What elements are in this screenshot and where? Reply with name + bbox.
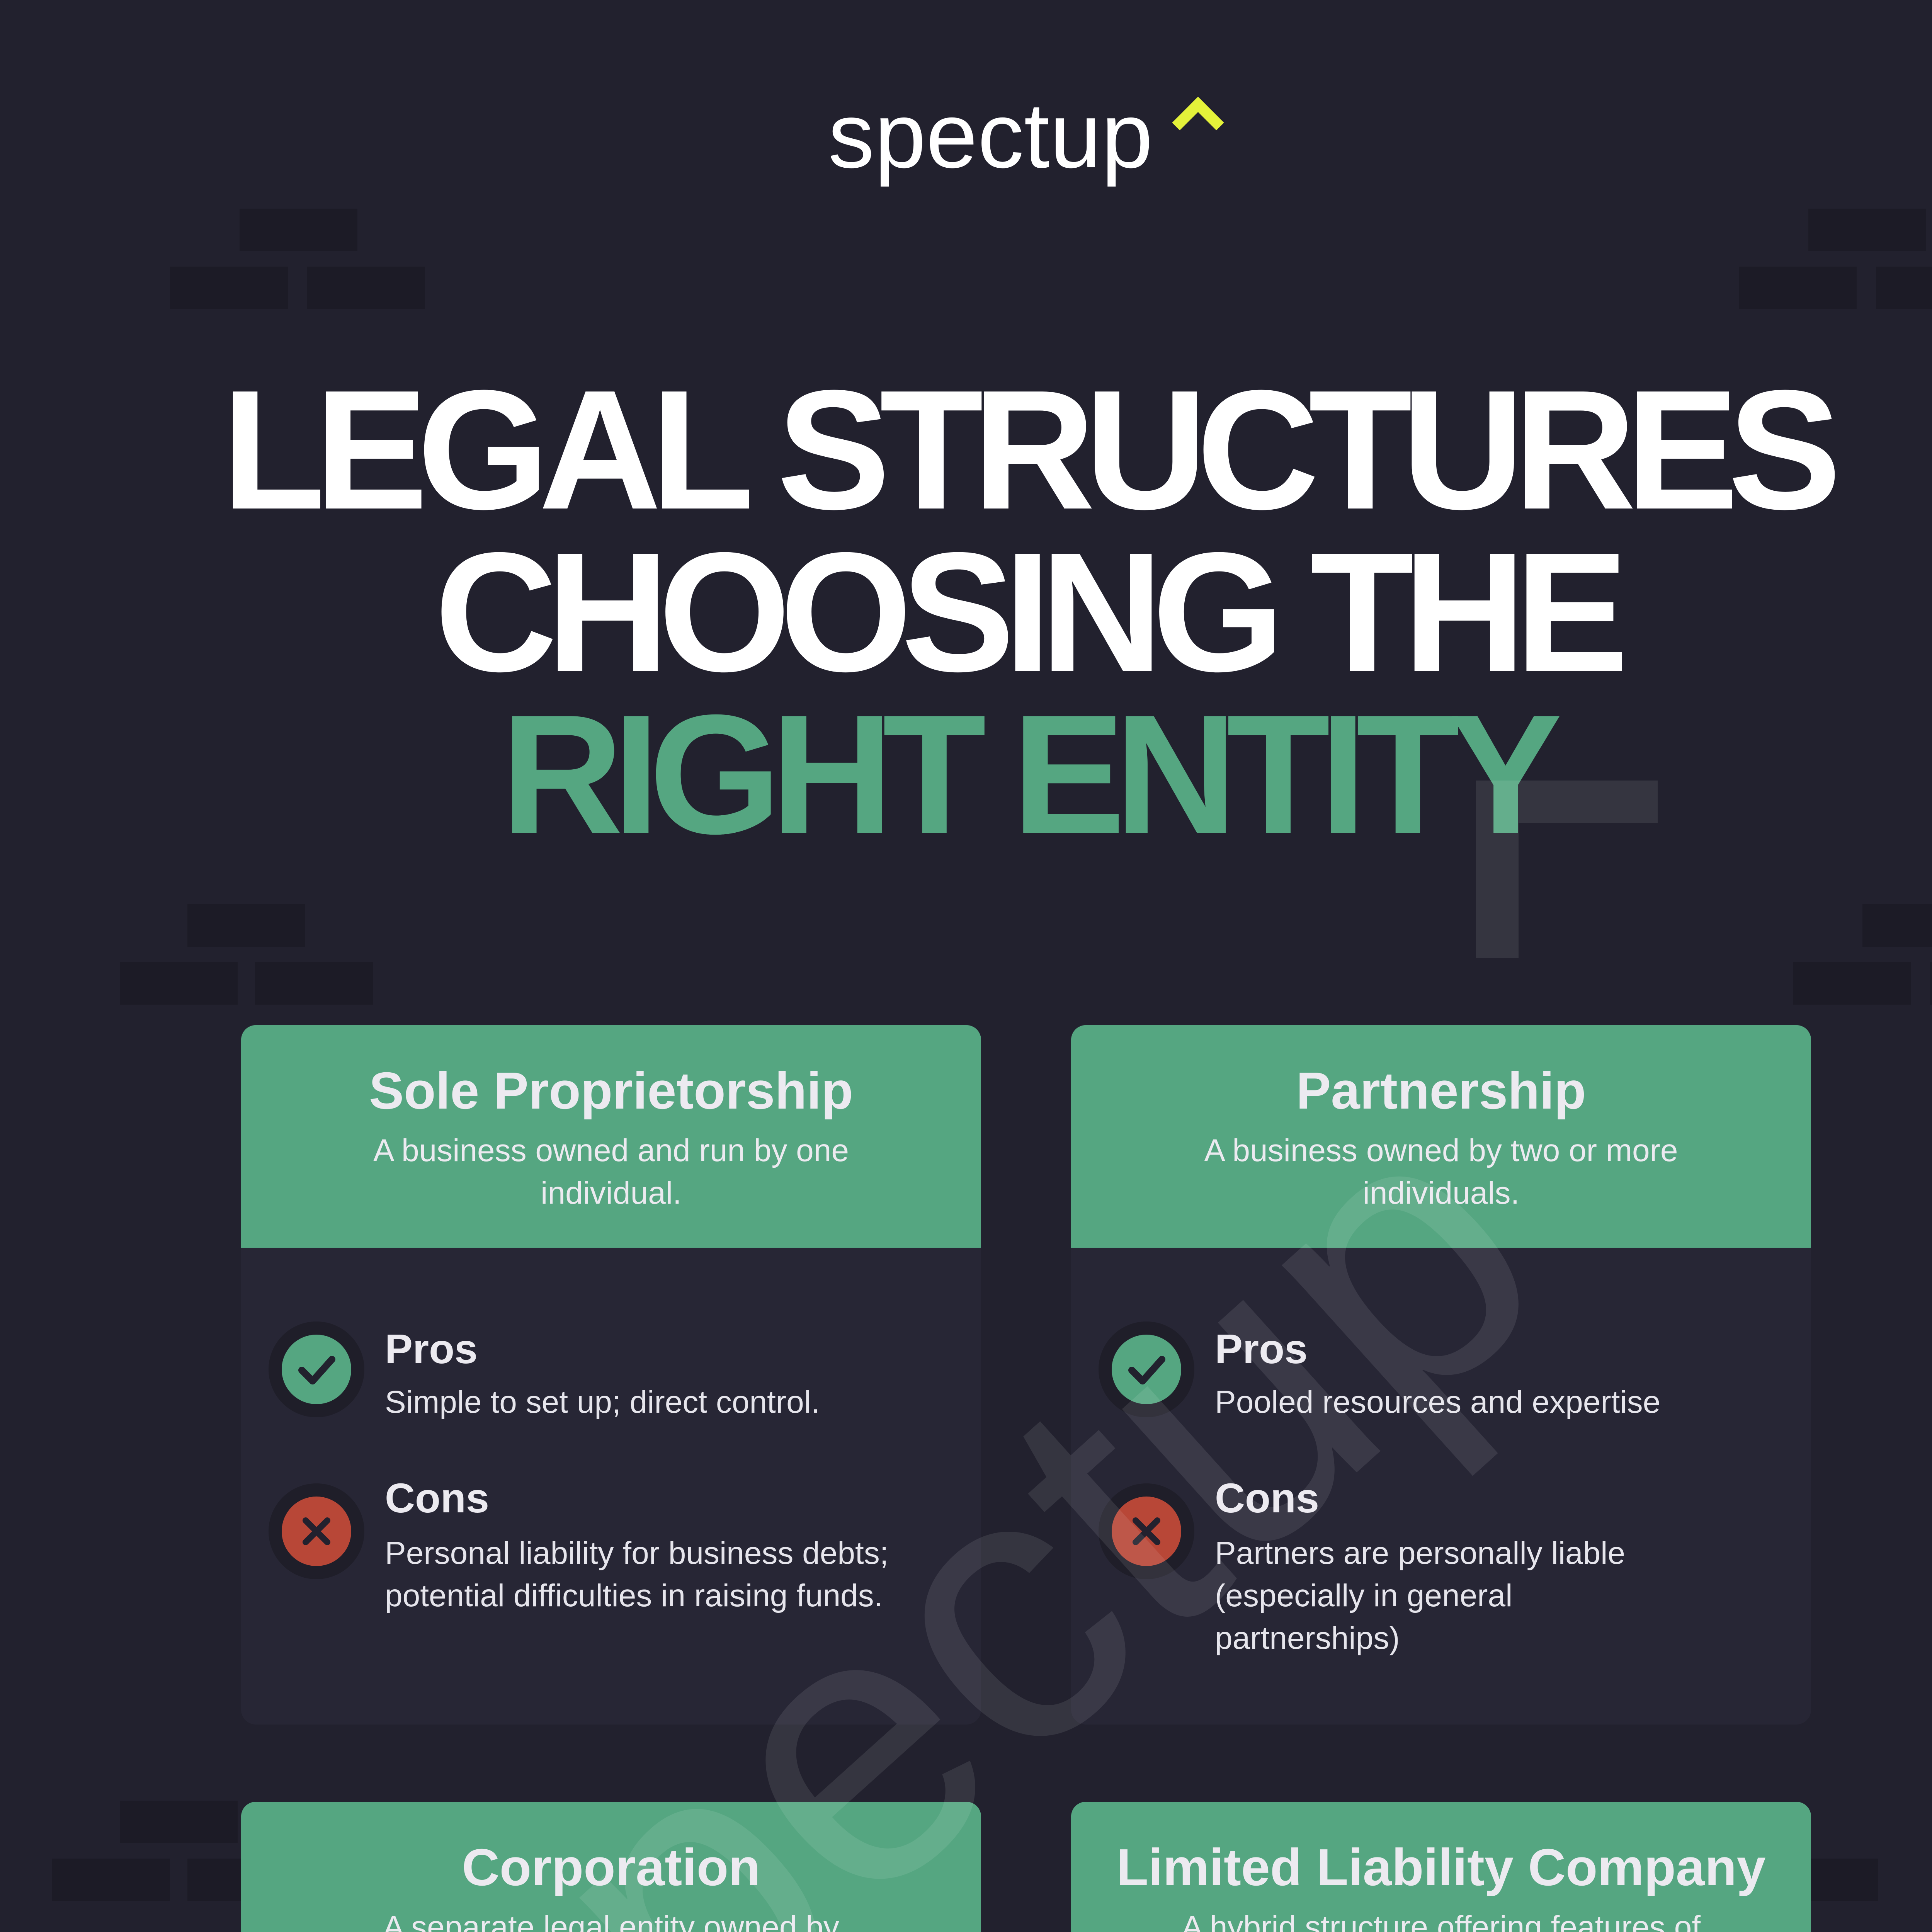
logo: spectup: [828, 83, 1153, 187]
title: [0, 369, 1932, 856]
title: CHOOSING THE: [435, 517, 1617, 707]
header: [241, 1025, 981, 1248]
card: sole proprietorship: Simple to set up; direct control.: [385, 1384, 820, 1420]
card: partnership: A business owned by two or more individuals.: [1204, 1133, 1678, 1211]
card: partnership: Partners are personally liable (especially in general partnerships): [1215, 1536, 1625, 1656]
pros: Pros: [385, 1325, 478, 1372]
card: partnership: Partnership: [1296, 1061, 1586, 1120]
card: llc: Limited Liability Company: [1116, 1838, 1766, 1896]
card: partnership: [1071, 1025, 1811, 1725]
watermark caret: [1476, 781, 1658, 958]
header: A business owned and run by one individual.: [373, 1133, 849, 1211]
icon: check: [269, 1321, 364, 1417]
cons: Cons: [385, 1475, 489, 1521]
cons: Cons: [1215, 1475, 1319, 1521]
card: sole proprietorship: Personal liability for business debts; potential difficulties in raising funds.: [385, 1536, 889, 1613]
title: LEGAL STRUCTURES: [221, 355, 1831, 545]
title: RIGHT ENTITY: [501, 680, 1551, 869]
card: partnership: Pooled resources and expertise: [1215, 1384, 1660, 1420]
header: Sole Proprietorship: [369, 1061, 853, 1120]
card: sole proprietorship: [241, 1025, 981, 1725]
pros: Pros: [1215, 1325, 1308, 1372]
card: corporation: [241, 1802, 981, 1932]
icon: check: [1099, 1321, 1194, 1417]
card: corporation: Corporation: [462, 1838, 760, 1896]
icon: cross: [269, 1483, 364, 1579]
icon: cross: [1099, 1483, 1194, 1579]
card: llc: [1071, 1802, 1811, 1932]
